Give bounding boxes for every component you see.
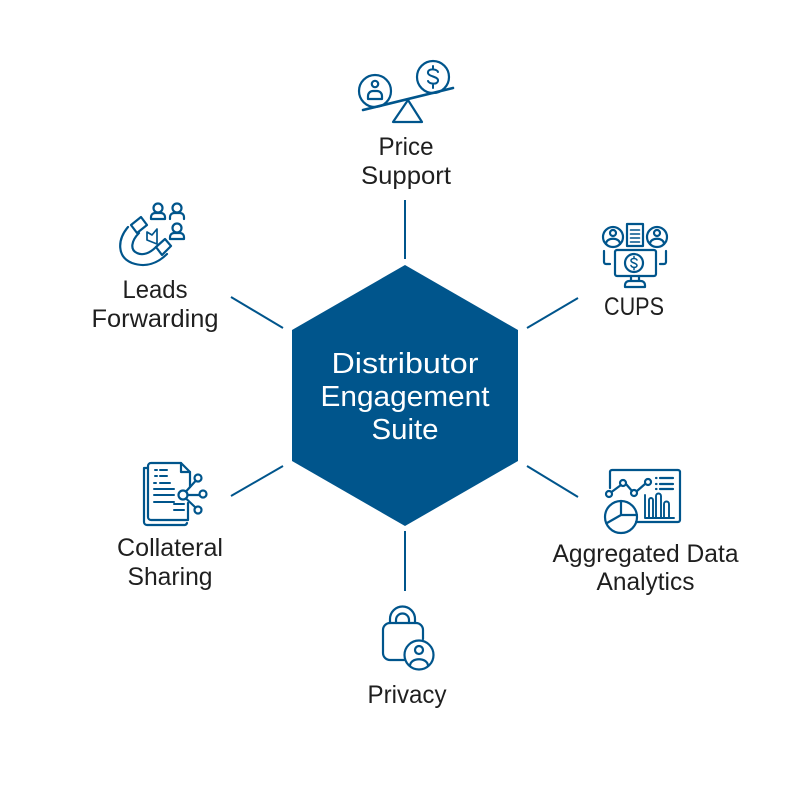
label: privacy: Privacy <box>368 681 447 709</box>
connector: lower left <box>231 466 283 496</box>
hexagon title: Suite <box>372 414 438 446</box>
icon: CUPS <box>603 224 667 287</box>
connector: bottom <box>404 531 406 591</box>
hexagon title <box>320 348 490 446</box>
connector: top <box>404 200 406 259</box>
icon: collateral sharing <box>144 463 206 525</box>
hexagon title: Engagement <box>320 381 490 413</box>
label: leads forwarding: Forwarding <box>92 305 218 333</box>
connector: lower right <box>527 466 578 497</box>
label: collateral sharing: Collateral <box>117 534 223 562</box>
label: leads forwarding: Leads <box>122 276 188 304</box>
connector: upper right <box>527 298 578 328</box>
label: price support: Price <box>378 133 434 161</box>
label: leads forwarding <box>92 276 218 333</box>
label: collateral sharing <box>117 534 223 591</box>
hexagon title: Distributor <box>332 348 479 380</box>
icon: aggregated data analytics <box>605 470 680 533</box>
icon: privacy lock <box>383 606 434 670</box>
label: collateral sharing: Sharing <box>128 563 212 591</box>
central hexagon <box>292 265 518 526</box>
label: aggregated data analytics: Aggregated Data <box>552 540 739 568</box>
icon: leads forwarding magnet <box>120 204 184 265</box>
label: price support: Support <box>361 162 451 190</box>
label: price support <box>361 133 451 190</box>
connector: upper left <box>231 297 283 328</box>
label: aggregated data analytics <box>552 540 739 596</box>
icon: price support balance <box>359 61 453 122</box>
label: CUPS: CUPS <box>604 293 664 321</box>
label: aggregated data analytics: Analytics <box>596 568 694 596</box>
